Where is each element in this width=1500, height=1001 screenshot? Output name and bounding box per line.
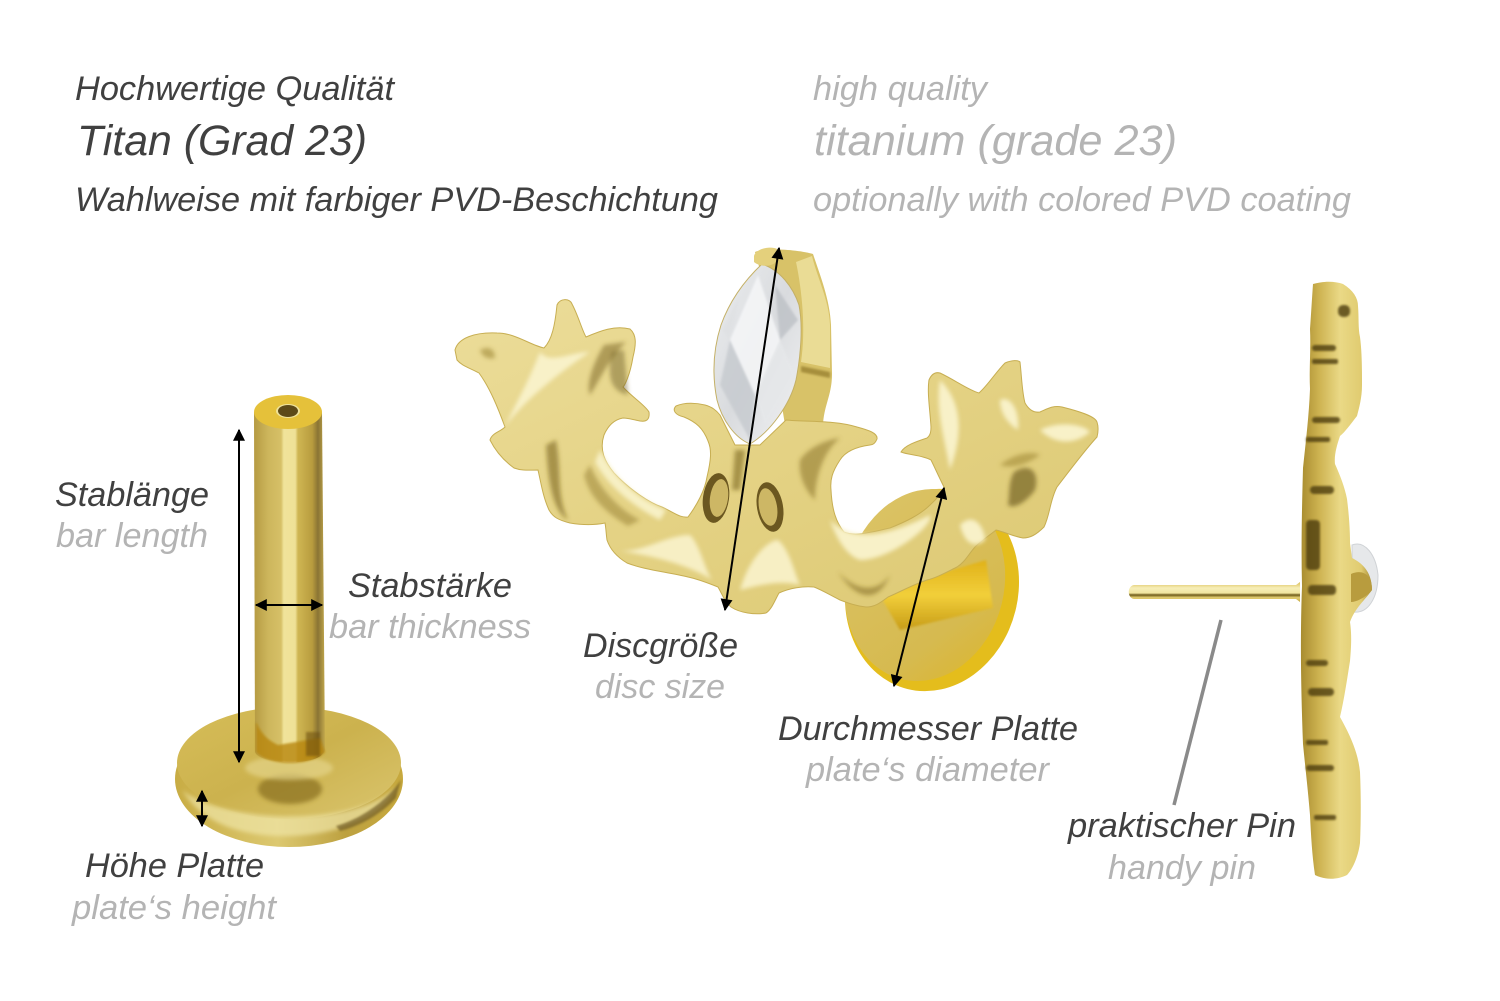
label: plate height [71, 847, 278, 927]
plate [175, 707, 403, 847]
line: high quality English: high quality [813, 70, 989, 108]
band highlight [796, 256, 830, 368]
dark stripes [1306, 305, 1350, 820]
bar top with hole [254, 395, 322, 429]
hole left [700, 471, 732, 525]
disc rim [824, 470, 1040, 710]
stem [878, 560, 993, 630]
label: plate height: plate‘s height [71, 889, 278, 927]
arrow: plate height [201, 791, 203, 826]
arrow: bar length [238, 430, 240, 762]
header: German text [75, 70, 718, 219]
stone facets [720, 275, 798, 440]
label: plate diameter: Durchmesser Platte [778, 710, 1078, 748]
gold silhouette [455, 300, 1098, 614]
illustration: gold marquise jewel top [455, 248, 1098, 614]
side view gem [1352, 544, 1378, 612]
label: bar length [55, 476, 209, 555]
hole right inner [756, 487, 780, 527]
pointer line: handy pin [1174, 620, 1221, 805]
line: titanium English: titanium (grade 23) [814, 117, 1177, 165]
label: bar length: bar length [56, 517, 208, 555]
header: English text [813, 70, 1351, 219]
gem prong [1351, 572, 1372, 602]
line: PVD coating English: optionally with colored PVD coating [813, 181, 1351, 219]
label: bar length: Stablänge [55, 476, 209, 514]
label: disc size: disc size [595, 668, 725, 706]
label: plate diameter [778, 710, 1078, 789]
label: disc size: Discgröße [583, 627, 738, 665]
arrow: disc size [725, 248, 779, 610]
label: handy pin [1067, 807, 1296, 887]
hole left inner [707, 478, 731, 518]
hole right [753, 480, 787, 534]
line: high quality German: Hochwertige Qualität [75, 70, 396, 108]
line: titanium German: Titan (Grad 23) [77, 117, 367, 165]
label: handy pin: handy pin [1108, 849, 1256, 887]
label: plate height: Höhe Platte [85, 847, 264, 885]
arrow: bar thickness [256, 604, 322, 606]
label: plate diameter: plate‘s diameter [805, 751, 1051, 789]
label: bar thickness: Stabstärke [348, 567, 512, 605]
surface shading [480, 342, 1090, 595]
label: disc size [583, 627, 738, 706]
disc face [825, 472, 1025, 698]
arrow: plate diameter [894, 488, 944, 686]
line: PVD coating German: Wahlweise mit farbiger PVD-Beschichtung [75, 181, 718, 219]
illustration: labret post with plate [175, 395, 403, 847]
illustration: side view with pin [1129, 282, 1378, 879]
illustration: back disc and stem [824, 470, 1040, 710]
pin [1129, 582, 1300, 602]
label: bar thickness: bar thickness [329, 608, 531, 646]
bar [254, 412, 325, 763]
label: bar thickness [329, 567, 531, 646]
side view silhouette [1301, 282, 1372, 879]
stone [714, 264, 801, 444]
label: handy pin: praktischer Pin [1067, 807, 1296, 845]
top prong [754, 248, 777, 266]
band shadow line [801, 366, 830, 378]
back band [755, 249, 832, 425]
